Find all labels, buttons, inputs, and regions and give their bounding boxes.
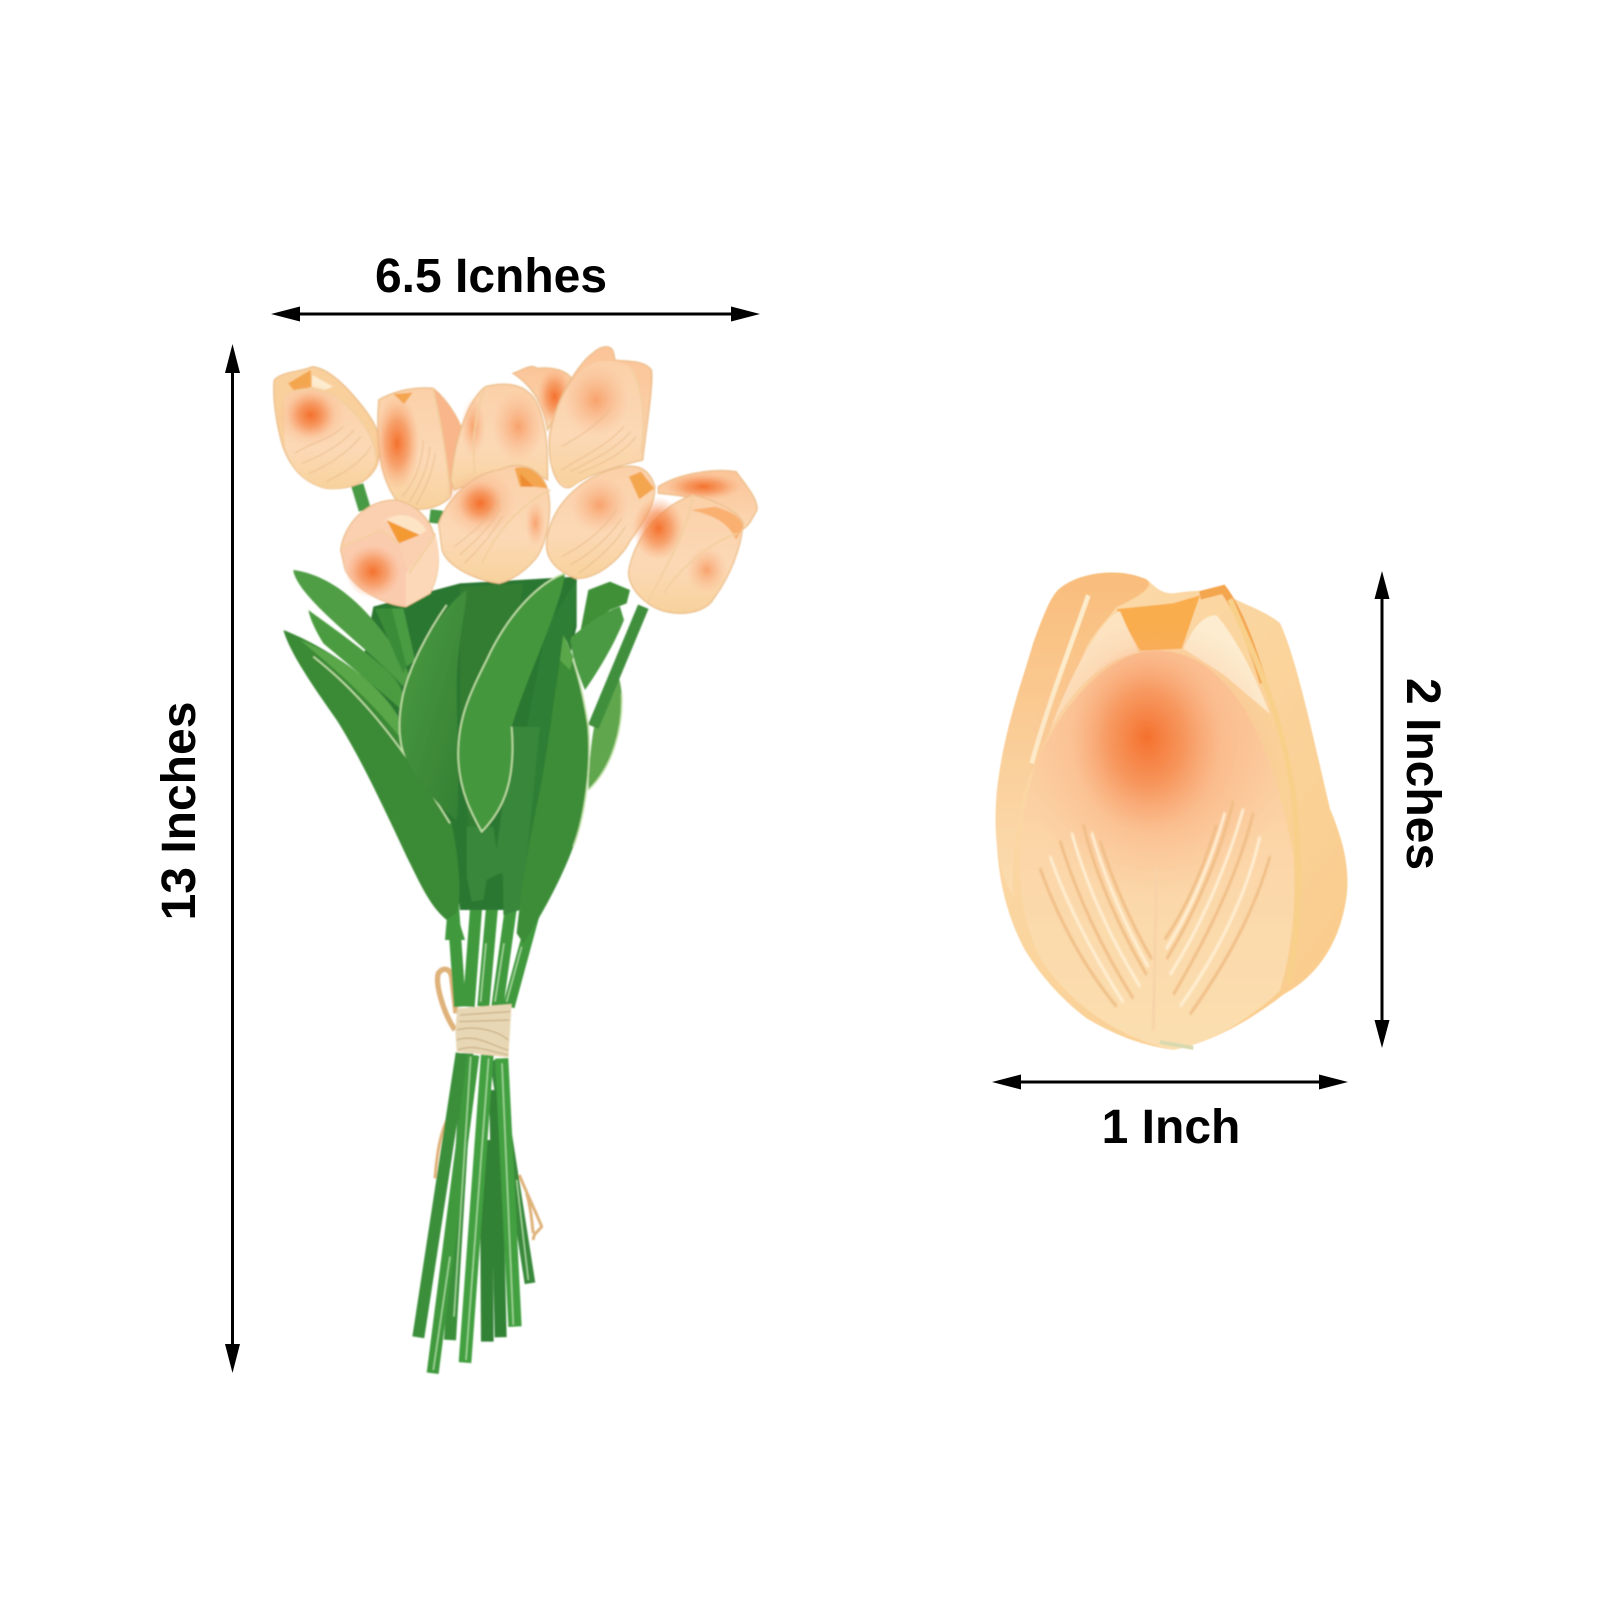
tulip: rear far right <box>658 471 757 530</box>
sheaths <box>467 727 540 915</box>
tulip: lower right-centre <box>546 466 655 578</box>
inner right pale petal <box>1183 615 1270 714</box>
label: bud width: 1 Inch <box>1102 1101 1240 1154</box>
left stem collar <box>445 913 465 940</box>
bud base shape <box>996 572 1347 1050</box>
right petal seam <box>1230 599 1298 983</box>
tulip: tall rear <box>549 347 652 488</box>
stems <box>418 873 537 1373</box>
left rear petal <box>996 572 1149 896</box>
centre folded leaf <box>458 573 565 832</box>
label: bouquet width: 6.5 Icnhes <box>375 250 607 303</box>
tulip: far left <box>274 367 380 489</box>
raffia strands <box>435 969 542 1240</box>
front petal <box>1020 619 1294 1050</box>
centre-left leaf <box>400 590 467 820</box>
tulip: rear centre <box>513 367 572 430</box>
tulip heads <box>274 347 757 613</box>
petal edge highlight <box>1032 595 1088 763</box>
left big leaf <box>283 630 459 920</box>
rear centre leaf <box>460 583 523 860</box>
upper right rim <box>1200 589 1263 682</box>
large single tulip bud <box>996 572 1347 1050</box>
base shadow detail <box>1160 1042 1193 1048</box>
stem highlights <box>433 943 528 1370</box>
tulip: lower left <box>341 500 439 607</box>
tulip: lower centre <box>439 465 550 583</box>
raffia band <box>455 1004 512 1057</box>
orange blotch <box>1027 619 1287 904</box>
petal veins <box>1040 801 1270 1030</box>
right front leaf <box>517 635 589 943</box>
label: bud height: 2 Inches <box>1396 678 1449 870</box>
bouquet of tulips <box>274 347 757 1373</box>
tulip opening <box>1117 595 1200 651</box>
height arrow: bouquet <box>225 344 240 1373</box>
label: bouquet height: 13 Inches <box>153 702 206 920</box>
width arrow: bouquet <box>271 306 760 322</box>
stems and raffia tie <box>418 873 542 1373</box>
left second leaf <box>308 610 403 710</box>
inner pale petals <box>1050 611 1138 730</box>
tulip: front right <box>629 495 743 613</box>
left upper leaf <box>293 570 415 687</box>
width arrow: bud <box>992 1074 1348 1090</box>
height arrow: bud <box>1374 571 1390 1048</box>
right rear leaf <box>588 672 622 790</box>
tulip: second left <box>375 388 463 509</box>
right rear stem leaf <box>500 580 577 913</box>
back foliage <box>360 577 577 910</box>
leaves <box>283 570 643 943</box>
tulip stems at neck <box>357 485 437 523</box>
tulip: centre rear <box>451 384 548 490</box>
right bud leaves and stem <box>570 582 643 727</box>
